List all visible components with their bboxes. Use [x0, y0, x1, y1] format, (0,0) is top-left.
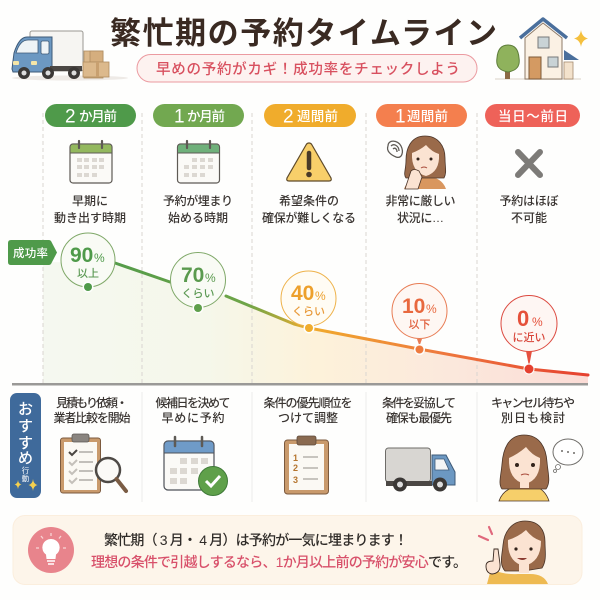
label: success rate tag: 成功率: [13, 246, 48, 260]
illustration: house, tree and sparkle: [495, 19, 588, 80]
icon: numbered clipboard: 1: [293, 453, 298, 463]
pill: 2週間前: 2: [283, 106, 294, 128]
data point: 10%: [392, 284, 447, 355]
data point: 0%: %: [532, 315, 543, 329]
data point: 10%: %: [426, 302, 437, 316]
data point: 0%: に近い: [512, 330, 546, 344]
description: 確保が難しくなる: [262, 210, 356, 225]
panel: bottom advice: [13, 516, 582, 584]
action text: 候補日を決めて: [156, 395, 230, 410]
data point: 70%: くらい: [182, 287, 214, 300]
subtitle pill: 早めの予約がカギ！成功率をチェックしよう: [156, 60, 460, 78]
label: recommended action: お: [18, 401, 33, 418]
data point: 90%: 90: [70, 244, 93, 267]
chart: success-rate line: [115, 263, 588, 375]
data point: 40%: %: [315, 289, 326, 303]
action text: キャンセル待ちや: [491, 396, 575, 410]
icon: warning triangle: [287, 143, 331, 181]
icon: numbered clipboard: 2: [293, 463, 298, 473]
pill: 1週間前: [376, 104, 467, 128]
description: 予約はほぼ: [500, 193, 558, 208]
label: success rate tag: [8, 240, 57, 265]
label: recommended action: す: [18, 418, 33, 435]
data point: 90%: %: [94, 251, 105, 265]
data point: 10%: 以下: [408, 318, 430, 331]
action text: 見積もり依頼・: [56, 395, 128, 410]
icon: worried woman: [388, 136, 446, 189]
data point: 10%: 10: [402, 295, 425, 318]
description: [54, 194, 126, 225]
pill: 2か月前: か月前: [79, 108, 117, 124]
illustration: woman pointing up: [479, 521, 548, 584]
description: [262, 193, 356, 225]
action: waitlist or other day: [491, 396, 583, 501]
icon: delivery truck: [386, 448, 455, 492]
label: recommended action: [10, 393, 41, 498]
icon: clipboard with magnifier: [60, 434, 126, 493]
advice text: 理想の条件で引越しするなら、1か月以上前の予約が安心です。: [91, 554, 467, 570]
description: 不可能: [511, 210, 547, 225]
pill: 2週間前: [264, 104, 356, 128]
axis baseline: [12, 383, 588, 386]
action text: 確保も最優先: [386, 410, 452, 425]
action: prioritize conditions: [264, 395, 352, 494]
solid column dividers: [142, 392, 477, 502]
advice text: 繁忙期（3月・4月）は予約が一気に埋まります！: [104, 532, 408, 548]
data point: 90%: [61, 233, 115, 292]
action text: 条件を妥協して: [382, 395, 456, 410]
description: 非常に厳しい: [386, 193, 456, 208]
description: [163, 193, 233, 225]
data point: 70%: %: [205, 271, 216, 285]
action text: [382, 395, 456, 425]
description: [386, 193, 456, 225]
action text: つけて調整: [278, 410, 338, 425]
icon: cross: [518, 152, 540, 175]
icon: calendar with check: [164, 437, 228, 496]
data point: 40%: くらい: [292, 305, 325, 318]
pill: 2週間前: 週間前: [297, 108, 338, 124]
pill: 1か月前: 1: [174, 106, 185, 128]
icon: thinking woman: [499, 435, 583, 501]
action: quote comparison: [54, 395, 130, 493]
description: 始める時期: [168, 210, 228, 225]
column: 1 week before: [376, 104, 467, 225]
pill: 2か月前: [45, 104, 136, 128]
description: [500, 193, 558, 225]
action text: 業者比較を開始: [54, 410, 130, 425]
icon: numbered clipboard: [284, 436, 328, 494]
label: recommended action: め: [18, 450, 33, 467]
pill: 2か月前: 2: [65, 106, 76, 128]
description: 動き出す時期: [54, 210, 126, 225]
action: compromise to secure: [382, 395, 456, 492]
action text: 条件の優先順位を: [264, 395, 352, 410]
column: 1 month before: [153, 104, 244, 225]
description: 早期に: [72, 194, 108, 208]
icon: calendar: [178, 141, 220, 183]
description: 予約が埋まり: [163, 193, 233, 208]
action: decide candidate date: [156, 395, 230, 496]
description: 希望条件の: [279, 193, 339, 208]
pill: 1週間前: 週間前: [407, 108, 448, 124]
icon: calendar: [70, 141, 112, 183]
icon: light bulb: [28, 527, 74, 573]
pill: 1週間前: 1: [395, 106, 406, 128]
illustration: moving truck and boxes: [12, 31, 128, 80]
icon: numbered clipboard: 3: [293, 475, 298, 485]
column: 2 weeks before: [262, 104, 356, 225]
data point: 90%: 以上: [77, 267, 99, 280]
data point: 70%: [170, 252, 226, 314]
data point: 40%: [281, 271, 336, 334]
data point: 70%: 70: [181, 264, 204, 287]
label: recommended action: 動: [22, 474, 30, 483]
column: 2 months before: [45, 104, 136, 225]
label: recommended action: す: [18, 435, 33, 452]
advice text: [91, 532, 467, 570]
action text: [491, 396, 575, 425]
vertical dashed column dividers: [43, 113, 477, 383]
data point: 0%: [501, 296, 557, 374]
subtitle pill: [137, 54, 477, 82]
pill: 1か月前: か月前: [187, 108, 225, 124]
action text: 別日も検討: [501, 410, 565, 425]
action text: [264, 395, 352, 425]
action text: [156, 395, 230, 425]
action text: 早めに予約: [162, 410, 224, 425]
description: 状況に…: [397, 210, 444, 225]
pill: 1か月前: [153, 104, 244, 128]
chart: area under success-rate curve: [43, 262, 588, 383]
label: recommended action: 行: [22, 465, 30, 475]
title: 繁忙期の予約タイムライン: [110, 16, 497, 51]
action text: [54, 395, 130, 425]
pill: 当日〜前日: 当日～前日: [498, 108, 568, 124]
column: same day to day before: [485, 104, 580, 225]
data point: 40%: 40: [291, 282, 314, 305]
data point: 0%: 0: [517, 306, 529, 331]
